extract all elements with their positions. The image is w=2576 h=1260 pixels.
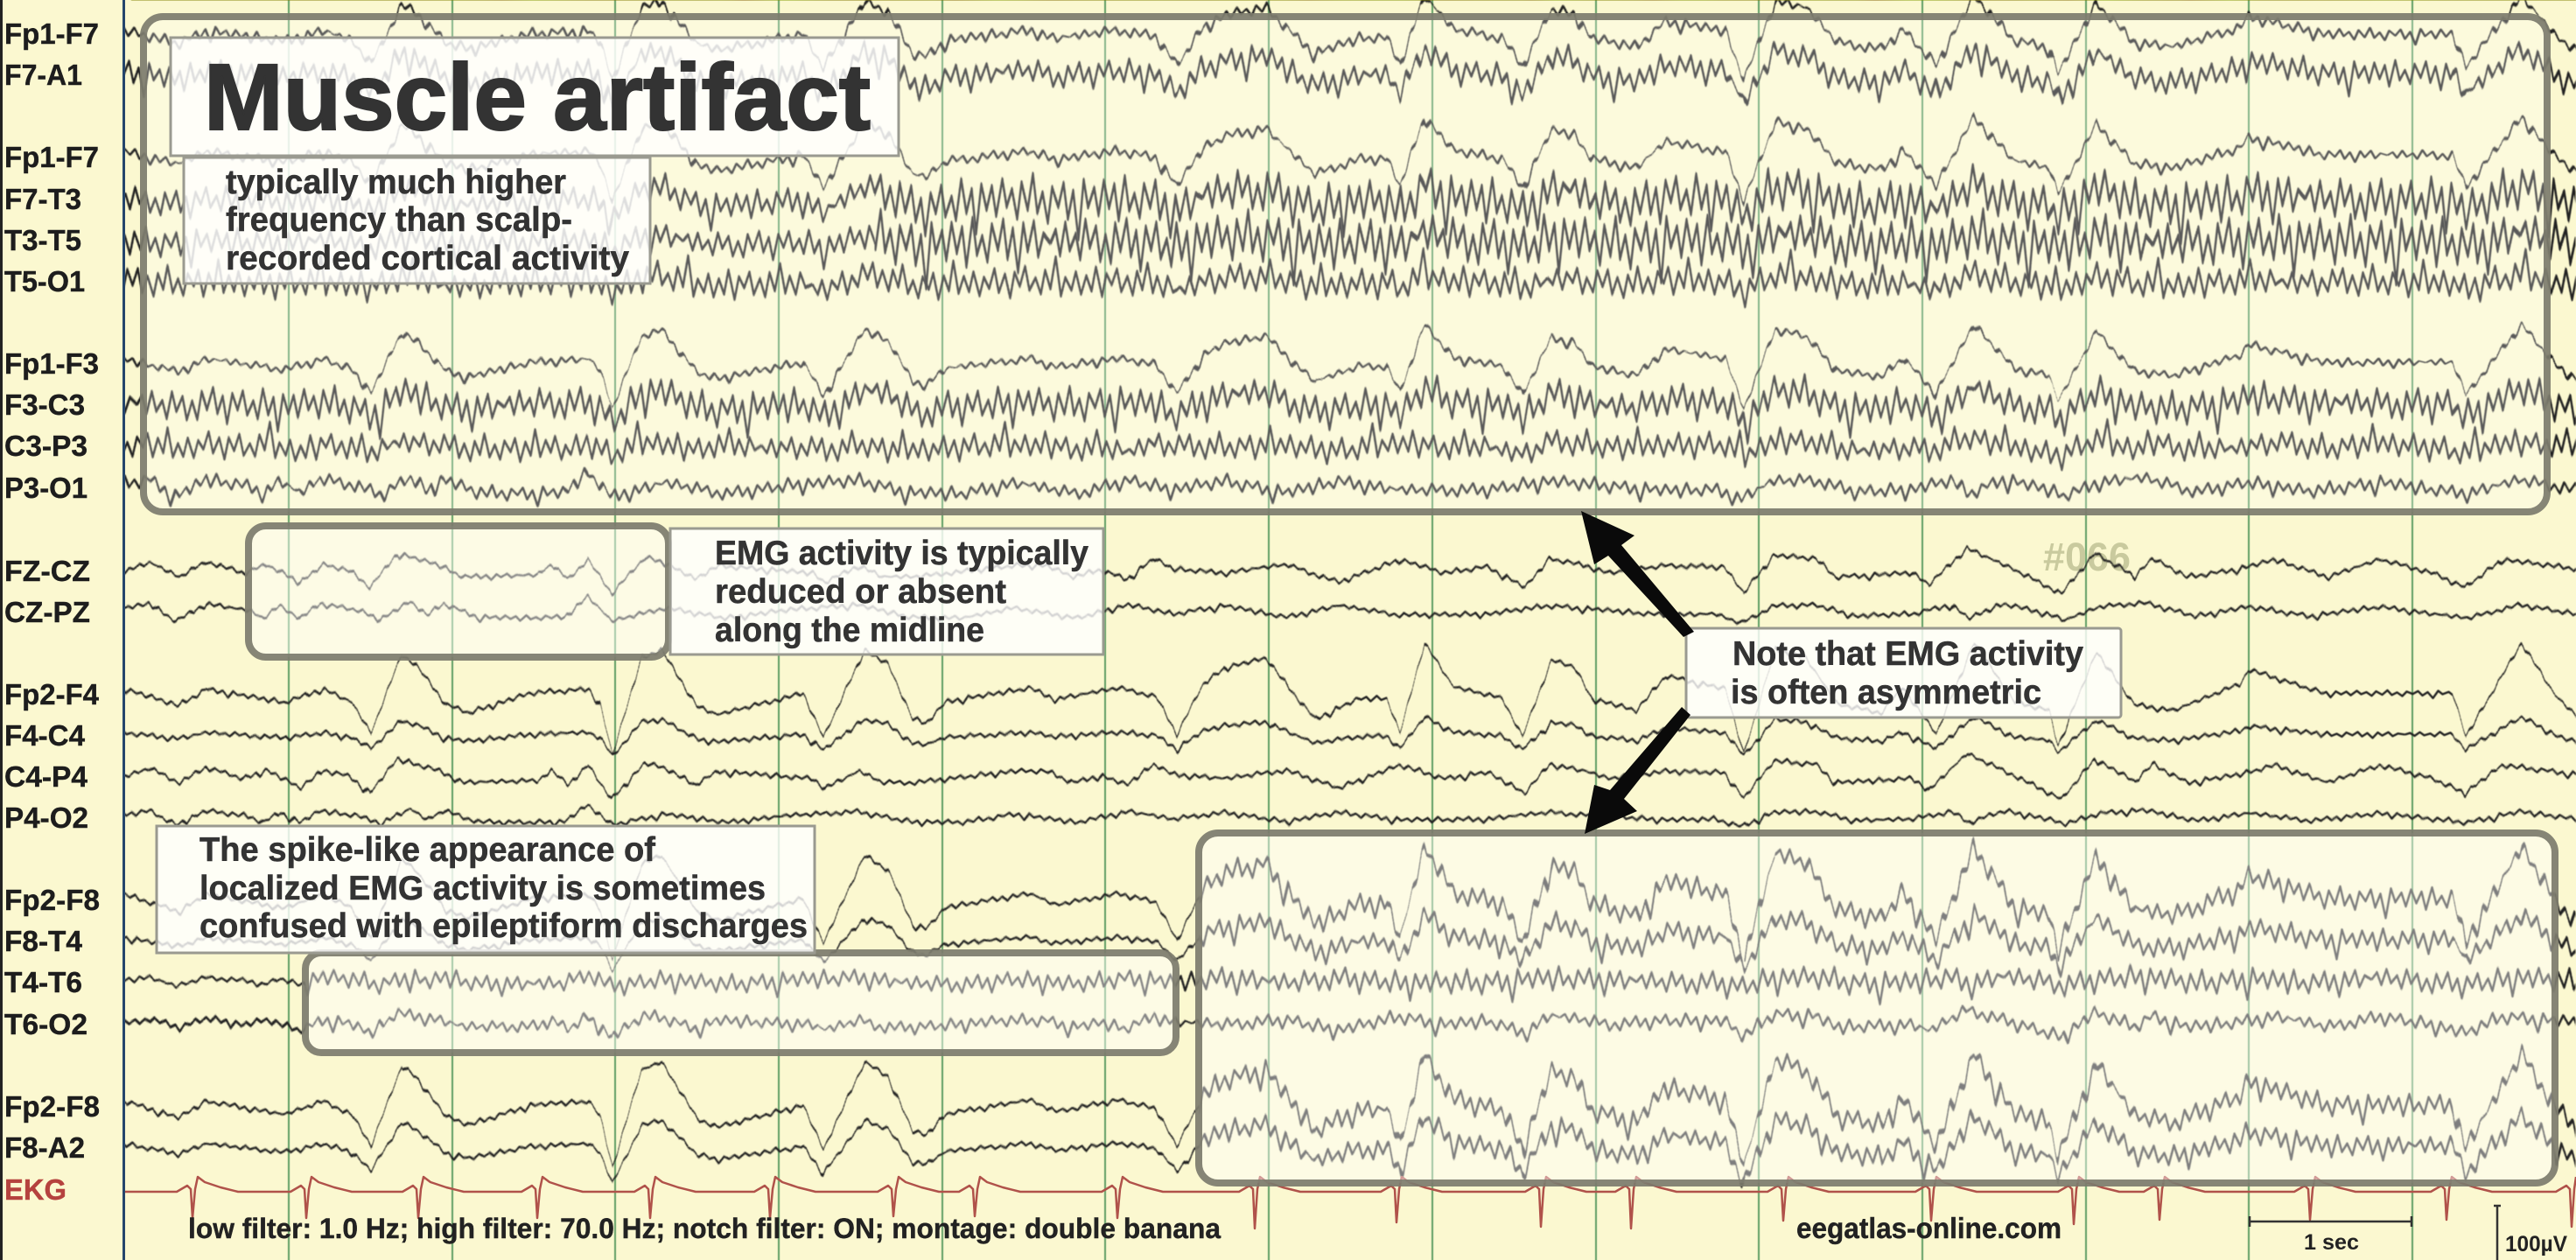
channel labels: F3-C3 [4, 388, 85, 421]
channel labels: T3-T5 [4, 224, 81, 256]
trace: T4-T6 right part [0, 968, 2576, 1002]
trace: T6-O2 right part [0, 1015, 2576, 1036]
channel labels: Fp1-F7 [4, 141, 99, 173]
watermark number: #066 [2043, 535, 2131, 579]
callout: midline note: EMG activity is typically [715, 535, 1088, 572]
channel labels: Fp1-F7 [4, 18, 99, 50]
recording settings text: low filter: 1.0 Hz; high filter: 70.0 Hz; notch filter: ON; montage: double banana [188, 1213, 1221, 1244]
trace: F4-C4 [0, 732, 2576, 739]
callout: frequency note: typically much higher [226, 164, 566, 201]
amplitude scale bar [2494, 1206, 2567, 1260]
callout: frequency note: frequency than scalp- [226, 201, 572, 239]
time scale bar: 1 sec [2304, 1230, 2359, 1255]
arrow: down to the right chain [1585, 707, 1690, 834]
amplitude scale bar: 100µV [2505, 1232, 2567, 1256]
channel labels: P3-O1 [4, 472, 88, 504]
channel labels: FZ-CZ [4, 555, 90, 587]
callout: title: Muscle artifact [204, 44, 871, 150]
trace: F7-A1 [0, 60, 2576, 96]
trace: F8-T4 right part [0, 928, 2576, 960]
trace: T3-T5 right part [0, 216, 2576, 284]
trace: FZ-CZ [0, 567, 2576, 575]
trace: F8-T4 left part [0, 937, 2576, 945]
trace: F7-T3 left part [125, 172, 875, 236]
channel labels: EKG [4, 1173, 66, 1206]
callout: midline note: reduced or absent [715, 573, 1006, 611]
channel labels: F4-C4 [4, 719, 86, 752]
trace: F7-T3 right part [873, 163, 2576, 247]
channel labels: F7-A1 [4, 59, 82, 91]
callout: asymmetry note: is often asymmetric [1731, 674, 2041, 711]
callout: frequency note: recorded cortical activity [226, 240, 629, 277]
channel labels: Fp2-F8 [4, 884, 100, 916]
trace: F8-A2 right part [0, 1135, 2576, 1166]
callout: spike-like note: localized EMG activity is sometimes [200, 870, 766, 907]
channel labels: CZ-PZ [4, 596, 90, 628]
trace: F8-A2 left part [0, 1144, 2576, 1152]
callout: frequency note [184, 158, 650, 284]
callout: asymmetry note: Note that EMG activity [1732, 635, 2083, 673]
channel labels: Fp2-F8 [4, 1090, 100, 1123]
panel: right temporal highlight box [1199, 833, 2555, 1183]
callout: asymmetry note [1686, 628, 2121, 718]
trace: CZ-PZ [0, 608, 2576, 616]
channel labels: C3-P3 [4, 430, 88, 462]
channel labels: T4-T6 [4, 966, 82, 998]
trace: EKG [125, 1177, 2576, 1228]
arrow: up to the left chain [1581, 511, 1694, 637]
left edge stripe [0, 0, 3, 1260]
channel labels: F8-A2 [4, 1131, 85, 1164]
trace: C3-P3 [0, 424, 2576, 461]
callout: spike-like note [157, 826, 815, 953]
callout: midline note [670, 528, 1103, 654]
callout: midline note: along the midline [715, 612, 984, 649]
channel labels: C4-P4 [4, 760, 88, 793]
trace: T3-T5 left part [0, 228, 2576, 267]
channel labels: F8-T4 [4, 925, 83, 957]
callout: spike-like note: confused with epileptiform discharges [200, 907, 808, 945]
channel labels: F7-T3 [4, 183, 81, 215]
trace: Fp2-F8 right part [0, 887, 2576, 919]
callout: spike-like note: The spike-like appearance of [200, 831, 656, 869]
panel: midline highlight box [248, 526, 668, 657]
trace: T6-O2 boxed part [0, 1017, 2576, 1035]
panel: T4-T6 T6-O2 highlight box [305, 953, 1176, 1053]
trace: Fp2-F8 left part [0, 896, 2576, 904]
trace: Fp1-F3 [0, 358, 2576, 371]
trace: F3-C3 [0, 386, 2576, 433]
channel labels: P4-O2 [4, 802, 88, 834]
channel labels: Fp1-F3 [4, 347, 99, 380]
trace: T6-O2 left part [0, 1019, 2576, 1030]
time axis line [122, 0, 125, 1260]
channel labels: T5-O1 [4, 265, 85, 298]
trace: T4-T6 boxed part [0, 971, 2576, 998]
channel labels [4, 18, 100, 1206]
trace: C4-P4 [0, 773, 2576, 780]
trace: T5-O1 [0, 256, 2576, 298]
trace: T4-T6 left part [0, 978, 2576, 986]
trace: Fp2-F4 [0, 690, 2576, 698]
trace: Fp1-F7 top [0, 28, 2576, 46]
trace: lower Fp2-F8 right part [0, 1094, 2576, 1125]
trace: P3-O1 [0, 479, 2576, 500]
trace: P4-O2 [0, 814, 2576, 822]
channel labels: T6-O2 [4, 1008, 88, 1040]
panel: large highlight box over left chain [144, 17, 2547, 512]
website credit: eegatlas-online.com [1796, 1212, 2062, 1244]
trace: Fp1-F7 second chain [0, 150, 2576, 165]
channel labels: Fp2-F4 [4, 678, 100, 710]
time scale bar [2250, 1216, 2412, 1255]
trace: lower Fp2-F8 left part [0, 1102, 2576, 1110]
